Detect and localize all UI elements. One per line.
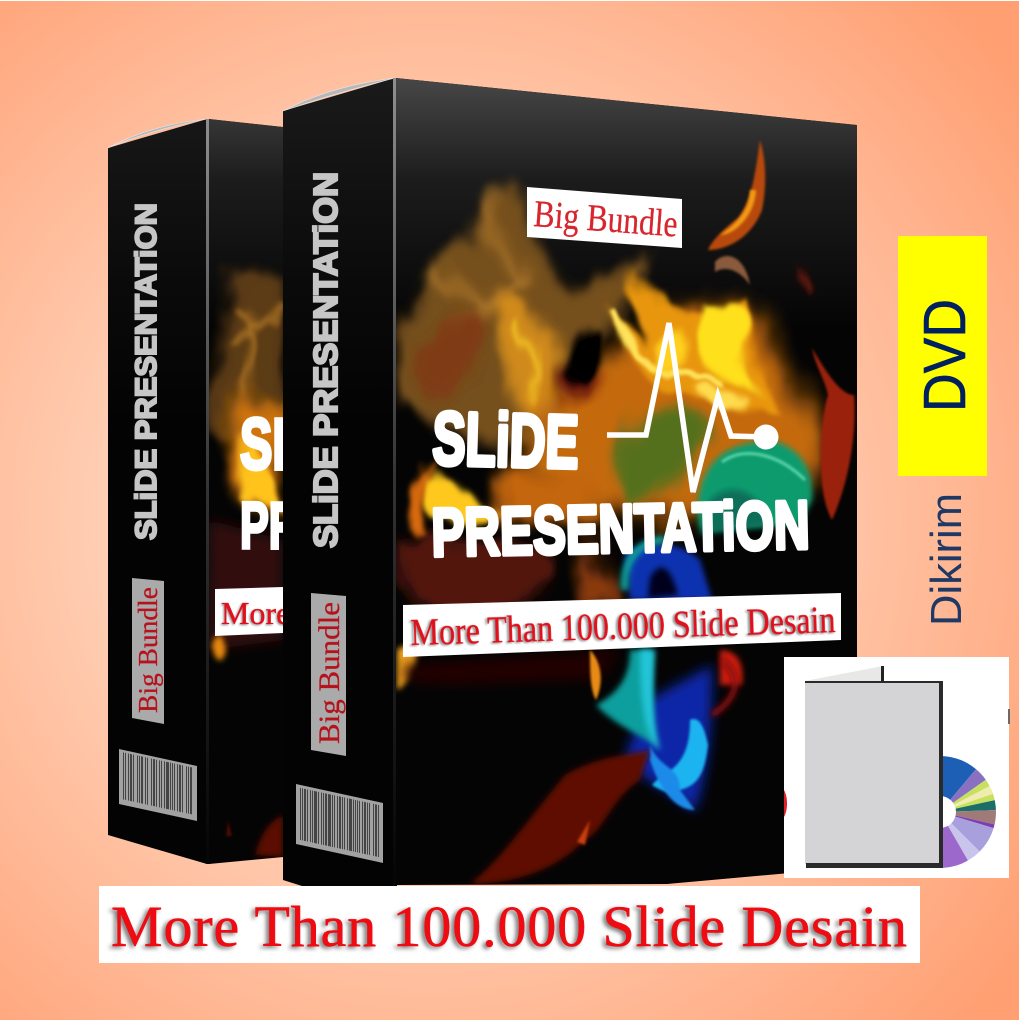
back box title [240, 416, 283, 550]
back box barcode [119, 749, 197, 821]
front box title: SLiDE [432, 396, 580, 484]
slide count banner: More Than 100.000 Slide Desain [410, 599, 836, 654]
front box spine [283, 78, 395, 886]
front box spine title: SLiDE PRESENTATiON [307, 172, 344, 548]
back box lid curve [108, 119, 207, 148]
top and right flames [698, 140, 855, 535]
disc hole [924, 796, 956, 828]
red mark [784, 790, 787, 817]
flames [397, 187, 824, 616]
back box spine label: Big Bundle [133, 587, 163, 713]
front box barcode [296, 784, 383, 863]
edge mark [1008, 709, 1010, 724]
yellow DVD tag: DVD [912, 299, 978, 412]
front box title [432, 408, 808, 558]
back box banner [215, 587, 290, 636]
heartbeat line icon [607, 323, 778, 492]
back box spine title: SLiDE PRESENTATiON [130, 203, 163, 540]
case cover [805, 682, 940, 864]
yellow DVD tag [898, 236, 987, 476]
product box: front [283, 70, 865, 890]
back box spine edge [206, 119, 210, 864]
front box lid curve [283, 78, 395, 111]
DVD photo [784, 657, 1010, 878]
lower flames [397, 540, 743, 884]
big bundle tag: Big Bundle [532, 193, 679, 246]
front box spine label: Big Bundle [313, 602, 346, 744]
back box title: SL [240, 405, 302, 485]
front box title: PRESENTATiON [431, 487, 810, 571]
case black edges [805, 681, 943, 868]
back box title: PR [240, 488, 300, 562]
back box spine [108, 119, 207, 864]
front box face [390, 70, 865, 890]
disc [943, 756, 996, 868]
label: Dikirim: Dikirim [922, 493, 971, 626]
back box banner: More [221, 595, 290, 631]
case flap [805, 666, 883, 681]
front box spine edge [393, 78, 397, 886]
bottom headline banner: More Than 100.000 Slide Desain [111, 894, 907, 959]
product box: back [108, 118, 283, 864]
back box front face [209, 119, 283, 864]
